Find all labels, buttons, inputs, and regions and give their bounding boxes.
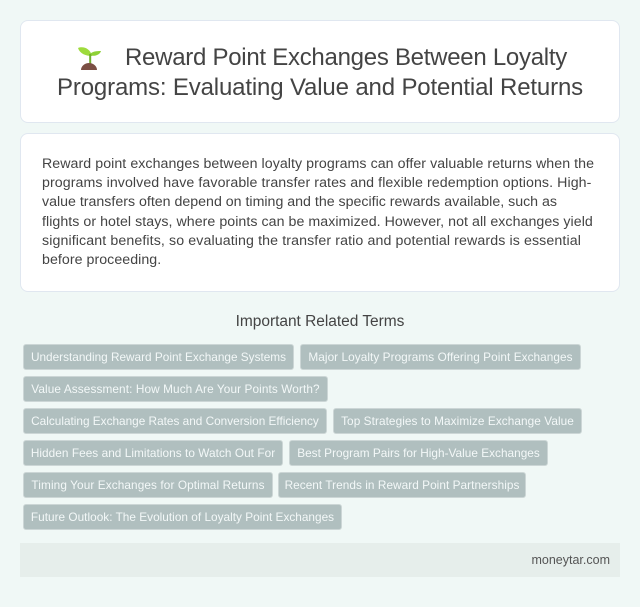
chip — [23, 472, 273, 498]
chip — [23, 376, 328, 402]
chip — [300, 344, 581, 370]
chip — [23, 408, 327, 434]
chip: Best Program Pairs for High-Value Exchanges — [297, 446, 540, 460]
summary text: before proceeding. — [42, 252, 161, 268]
title — [57, 44, 583, 101]
summary text: Reward point exchanges between loyalty programs can offer valuable returns when the — [42, 156, 594, 172]
chip: Timing Your Exchanges for Optimal Returns — [31, 478, 265, 492]
summary text — [42, 156, 594, 268]
chip — [289, 440, 548, 466]
icon: seedling — [78, 47, 101, 70]
summary text: significant benefits, so evaluating the transfer ratio and potential rewards is essential — [42, 233, 581, 249]
chip: Future Outlook: The Evolution of Loyalty Point Exchanges — [31, 510, 334, 524]
chip: Value Assessment: How Much Are Your Points Worth? — [31, 382, 320, 396]
header panel — [20, 20, 620, 123]
chip — [23, 344, 294, 370]
chip: Calculating Exchange Rates and Conversion Efficiency — [31, 414, 319, 428]
chip: Top Strategies to Maximize Exchange Value — [341, 414, 574, 428]
chip — [278, 472, 526, 498]
related terms chips — [23, 344, 582, 530]
chip — [23, 440, 283, 466]
chip: Major Loyalty Programs Offering Point Exchanges — [308, 350, 573, 364]
chip: Understanding Reward Point Exchange Systems — [31, 350, 286, 364]
title: Reward Point Exchanges Between Loyalty — [125, 44, 567, 71]
title: Programs: Evaluating Value and Potential Returns — [57, 74, 583, 101]
chip — [23, 504, 342, 530]
summary panel — [20, 133, 620, 292]
chip: Hidden Fees and Limitations to Watch Out For — [31, 446, 275, 460]
summary text: flights or hotel stays, where points can be maximized. However, not all exchanges yield — [42, 214, 593, 230]
chip — [333, 408, 582, 434]
summary text: programs involved have favorable transfer rates and flexible redemption options. High- — [42, 175, 591, 191]
footer source: moneytar.com — [531, 553, 610, 567]
chip: Recent Trends in Reward Point Partnerships — [285, 478, 519, 492]
section heading: Important Related Terms — [236, 313, 404, 330]
summary text: value transfers often depend on timing and the specific rewards available, such as — [42, 194, 557, 210]
footer bar — [20, 543, 620, 577]
